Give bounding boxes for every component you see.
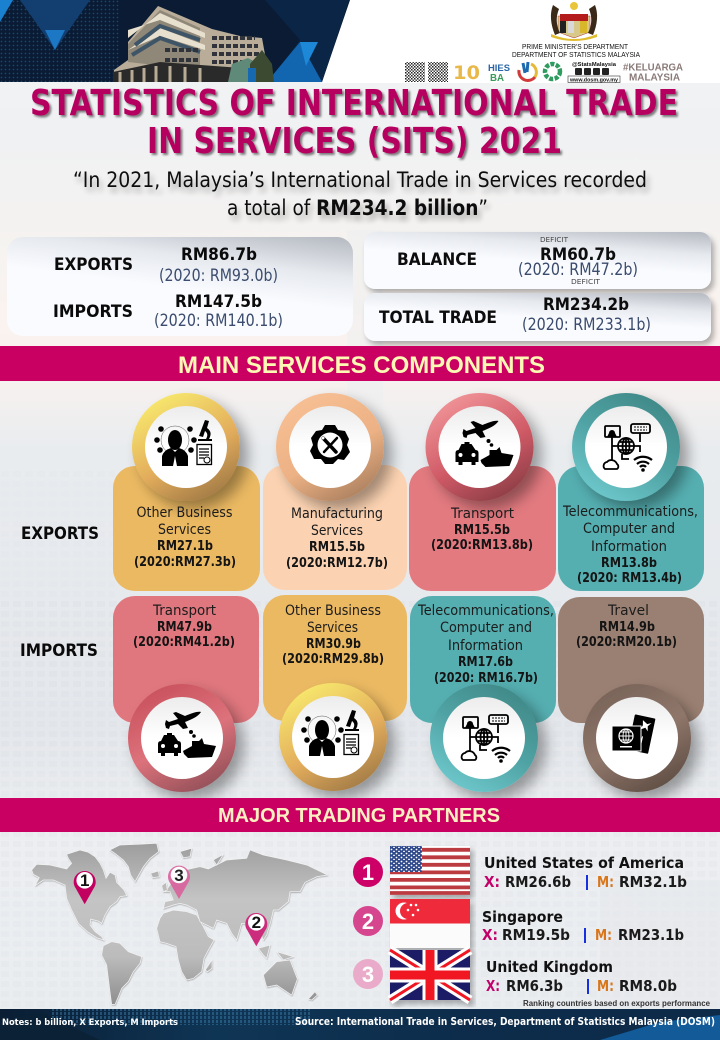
card: imports other business services: Other Business [285,603,381,619]
icon badge [572,393,680,501]
card: imports transport [113,596,259,792]
heading: major trading partners: MAJOR TRADING PARTNERS [218,804,500,827]
icon badge [583,684,691,792]
exports and imports values: RM26.6b [505,873,571,891]
department name: DEPARTMENT OF STATISTICS MALAYSIA [512,52,640,59]
icon: coat of arms of Malaysia [551,2,597,41]
panel: total trade: (2020: RM233.1b) [522,315,651,335]
rank badge 1 [353,857,383,887]
card: imports telecommunications: Telecommunications, [417,603,554,619]
pin: 3 United Kingdom [168,866,190,899]
logo: Keluarga Malaysia: #KELUARGA [623,62,683,74]
flag: Singapore [390,899,470,948]
partner: United States of America [484,854,687,891]
world map [32,843,327,1004]
quote [73,168,647,220]
card: exports telecommunications: Computer and [583,521,675,537]
card: exports transport [409,393,556,591]
card: imports transport: Transport [152,603,216,619]
header: building banner [0,0,350,82]
card: exports manufacturing services: Services [311,523,363,539]
card: exports transport: (2020:RM13.8b) [431,538,533,553]
imports: RM147.5b [175,292,262,312]
title [30,83,678,162]
rank badge 3 [353,959,383,989]
exports and imports values [482,926,684,944]
card: exports manufacturing services: RM15.5b [309,540,365,555]
imports: IMPORTS [53,302,133,322]
background city skyline texture [0,230,720,1008]
exports: EXPORTS [54,255,133,275]
social handles: www.dosm.gov.my [569,78,619,84]
quote: a total of RM234.2 billion” [227,196,488,220]
quote: “In 2021, Malaysia’s International Trade in Services recorded [73,168,647,192]
exports [54,245,278,286]
heading: major trading partners [0,798,720,832]
imports: (2020: RM140.1b) [154,311,283,331]
social handles [568,62,620,84]
logo: SDG wheel [545,64,560,79]
rank badge 3: 3 [362,962,374,987]
rank badge 2: 2 [362,909,374,934]
icon badge [430,684,538,792]
panel: balance [364,232,711,289]
exports and imports values: RM8.0b [619,977,677,995]
icon badge [128,684,236,792]
card: exports other business services [113,393,260,591]
card: exports other business services: Other Business [136,505,232,521]
panel: total trade: TOTAL TRADE [379,308,497,328]
icon badge [132,393,240,501]
card: imports telecommunications: (2020: RM16.7b) [434,671,538,686]
card: imports other business services: Services [307,620,358,636]
logo: 10 years: 10 [453,62,480,84]
logo: Keluarga Malaysia [623,62,683,84]
exports and imports values [484,873,687,891]
card: exports other business services: Services [158,522,211,538]
partner: Singapore [482,908,684,944]
row label: exports: EXPORTS [21,524,99,544]
title: IN SERVICES (SITS) 2021 [147,121,562,162]
card: exports other business services: (2020:RM27.3b) [134,555,236,570]
flag: United States [390,846,470,895]
partner: United States of America: United States of America [484,854,684,872]
exports and imports values: RM6.3b [506,977,563,995]
card: imports telecommunications: RM17.6b [458,655,513,670]
icon badge [279,683,387,791]
partner: United Kingdom: United Kingdom [486,958,613,976]
card: imports travel: Travel [607,603,649,619]
card: exports transport: RM15.5b [454,523,510,538]
exports: (2020: RM93.0b) [159,266,278,286]
card: imports transport: RM47.9b [157,620,212,635]
heading: main services components: MAIN SERVICES COMPONENTS [178,352,545,379]
card: imports other business services: RM30.9b [306,637,361,652]
card: imports travel [558,597,704,792]
card: imports transport: (2020:RM41.2b) [133,635,235,650]
card: imports travel: RM14.9b [599,620,655,635]
rank badge 1: 1 [362,860,374,885]
icon: QR code 2 [428,62,448,82]
exports and imports values: X: [484,873,500,891]
department name [512,44,640,59]
panel: total trade: RM234.2b [543,295,629,315]
pin: 2 Singapore: 2 [252,913,261,932]
exports and imports values: M: [597,873,614,891]
flag: United Kingdom [390,950,470,1000]
icon badge [426,393,534,501]
pin: 2 Singapore [245,913,267,946]
logo: HIES BA [488,63,510,84]
logo: census ring [519,62,536,81]
pin: 1 United States [74,871,96,904]
card: exports telecommunications: RM13.8b [601,556,657,571]
heading: main services components [0,346,720,381]
card: imports other business services: (2020:RM29.8b) [282,652,384,667]
panel: balance: DEFICIT [540,236,569,244]
card: exports telecommunications: Telecommunications, [562,504,698,520]
panel: balance: (2020: RM47.2b) [518,260,638,280]
exports and imports values: X: [482,926,498,944]
card: imports telecommunications: Information [448,638,523,654]
partner: Singapore: Singapore [482,908,563,926]
panel: exports and imports [7,237,353,336]
row label: imports: IMPORTS [20,641,98,661]
imports [53,292,283,331]
card: exports manufacturing services [263,393,407,590]
logos row [405,62,683,84]
panel: balance: DEFICIT [571,278,601,286]
card: imports other business services [263,595,407,791]
icon: DOSM building [113,6,274,82]
panel: balance: BALANCE [397,250,477,270]
card: imports travel: (2020:RM20.1b) [576,635,677,650]
exports and imports values: X: [486,977,500,995]
card: exports telecommunications: (2020: RM13.4b) [577,571,682,586]
department name: PRIME MINISTER'S DEPARTMENT [522,44,629,51]
notes: Notes: b billion, X Exports, M Imports [2,1018,178,1028]
card: imports telecommunications: Computer and [440,620,532,636]
icon: QR code 1 [405,62,425,82]
pin: 3 United Kingdom: 3 [174,866,184,885]
panel: balance: RM60.7b [540,245,616,265]
logo: Keluarga Malaysia: MALAYSIA [629,72,680,84]
icon badge [276,393,384,501]
card: imports telecommunications [410,596,556,792]
logo: HIES BA: BA [490,73,504,84]
exports and imports values: RM23.1b [618,926,684,944]
exports and imports values: M: [595,926,612,944]
card: exports telecommunications: Information [591,539,667,555]
card: exports telecommunications [558,393,704,591]
card: exports manufacturing services: Manufacturing [291,506,383,522]
card: exports manufacturing services: (2020:RM12.7b) [286,556,388,571]
exports and imports values: RM19.5b [502,926,570,944]
panel: total trade [364,293,711,341]
card: exports transport: Transport [450,506,514,522]
exports: RM86.7b [181,245,257,265]
footer band [0,1009,720,1040]
pin: 1 United States: 1 [80,871,89,890]
card: exports other business services: RM27.1b [157,539,213,554]
logo: HIES BA: HIES [488,63,510,73]
rank badge 2 [353,906,383,936]
exports and imports values [486,977,677,995]
partner: United Kingdom [486,958,677,995]
header: white logo area [322,0,720,83]
exports and imports values: M: [597,977,614,995]
social handles: @StatsMalaysia [572,62,617,68]
exports and imports values: RM32.1b [619,873,687,891]
ranking note: Ranking countries based on exports performance [523,999,711,1008]
